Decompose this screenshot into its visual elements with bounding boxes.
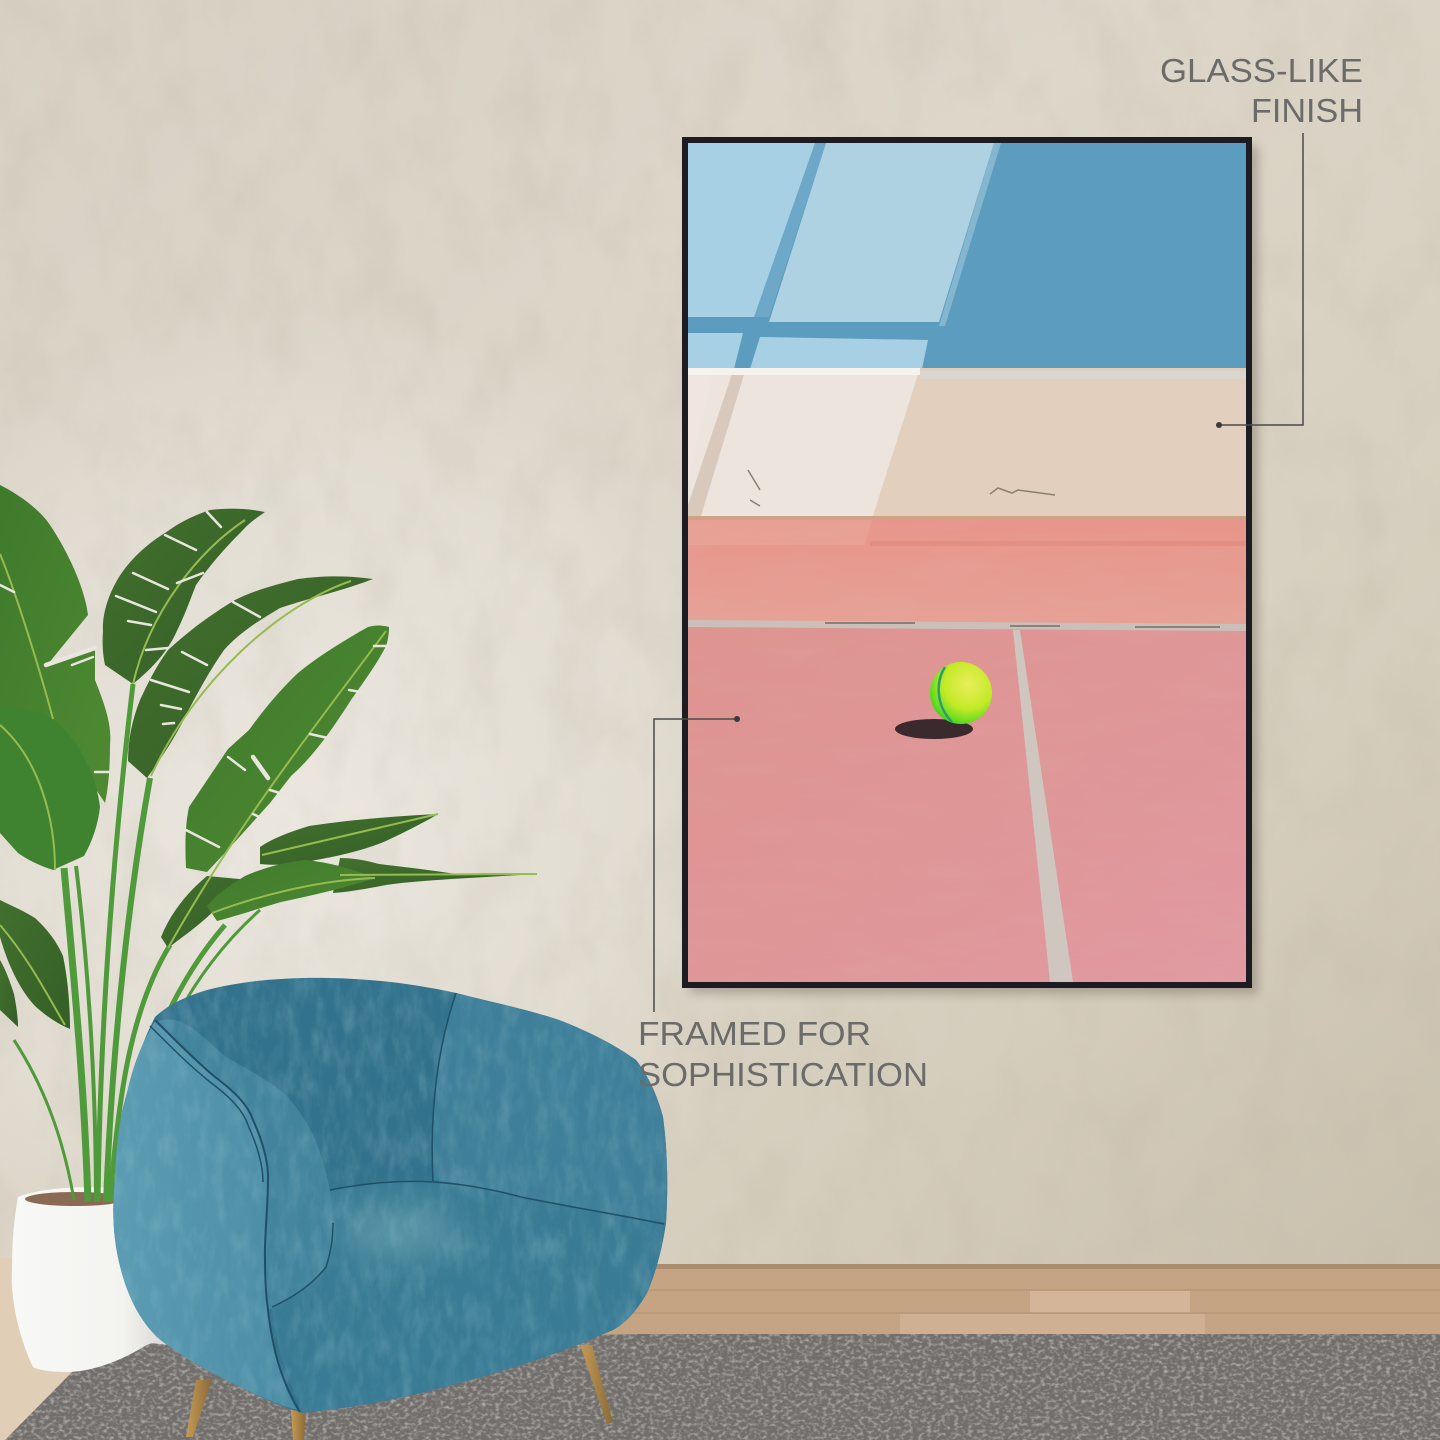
- court lines: [688, 620, 1246, 631]
- callout: glass-like finish: [1160, 52, 1363, 428]
- chair piping and seams: [150, 993, 664, 1412]
- tennis ball: [930, 662, 992, 724]
- chair legs: [186, 1345, 613, 1440]
- label: GLASS-LIKE: [1160, 52, 1363, 89]
- leaf ribs: [0, 520, 537, 1025]
- armchair: [113, 978, 667, 1440]
- rug: [5, 1334, 1440, 1440]
- window light panes: [688, 143, 994, 369]
- plant: [0, 485, 537, 1372]
- fabric texture: [113, 978, 667, 1413]
- white leaf splits: [0, 512, 388, 847]
- leaves: [0, 485, 110, 803]
- stems: [14, 684, 260, 1202]
- ball shadow: [895, 719, 973, 739]
- blue wall: [688, 143, 1246, 373]
- upper court: [688, 520, 1246, 624]
- lower court: [688, 624, 1246, 982]
- wood floor: [0, 1258, 1440, 1440]
- chair left arm outer: [113, 1022, 297, 1410]
- callout: glass-like finish: FINISH: [1251, 92, 1363, 129]
- chair seat: [272, 1181, 664, 1413]
- leader line: [654, 719, 737, 1012]
- chair back right panel: [432, 993, 667, 1223]
- framed artwork: [684, 140, 1258, 994]
- pot: [12, 1187, 170, 1372]
- chair body and back: [113, 978, 667, 1413]
- cream wall band: [873, 368, 1246, 516]
- label: FRAMED FOR: [638, 1015, 871, 1052]
- painting: tennis court: [688, 143, 1246, 982]
- chair arm roll: [155, 1019, 333, 1310]
- callout: framed for sophistication: SOPHISTICATION: [638, 1056, 928, 1093]
- reflection soft edges: [939, 143, 1001, 326]
- leader line: [1219, 133, 1303, 425]
- black frame: [684, 140, 1250, 986]
- callout: framed for sophistication: [638, 716, 928, 1093]
- frame shadow: [690, 146, 1258, 994]
